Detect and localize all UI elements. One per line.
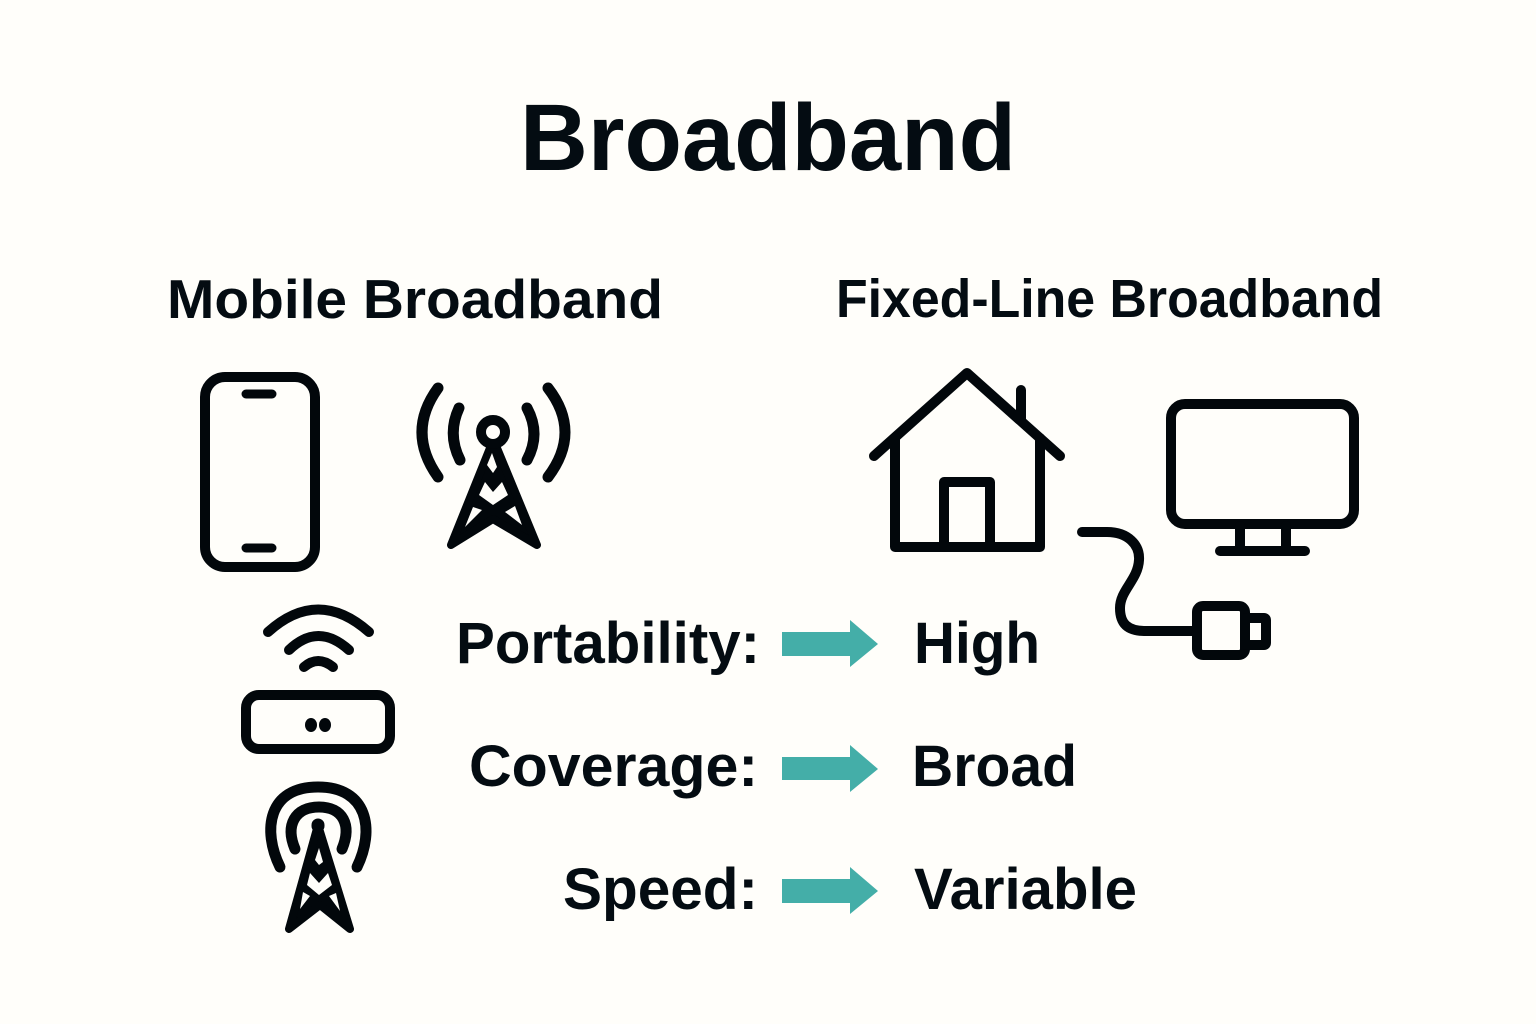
icon: cell tower with signal waves	[422, 388, 565, 545]
arrow	[782, 745, 878, 792]
row: portability	[456, 611, 1040, 676]
value: Variable	[914, 857, 1137, 922]
icon: house	[874, 373, 1060, 547]
icon: smartphone	[205, 377, 315, 567]
router body	[246, 695, 390, 749]
tower body	[451, 448, 537, 545]
antenna head	[481, 420, 505, 444]
heading: mobile broadband: Mobile Broadband	[167, 268, 663, 330]
row: coverage	[469, 734, 1077, 799]
icon: second cell tower	[271, 787, 366, 929]
value: Broad	[912, 734, 1077, 799]
lattice openings	[465, 453, 522, 527]
arrow	[782, 867, 878, 914]
router lights	[305, 718, 331, 732]
icon: monitor	[1171, 404, 1354, 551]
wifi waves	[268, 610, 369, 667]
title: Broadband	[520, 85, 1016, 191]
row: speed	[563, 857, 1137, 922]
icon: wifi router	[246, 610, 390, 749]
label: Speed:	[563, 857, 758, 922]
heading: fixed-line broadband: Fixed-Line Broadband	[836, 269, 1383, 329]
signal waves	[422, 388, 565, 477]
icon: cable and plug	[1082, 532, 1266, 655]
label: Coverage:	[469, 734, 758, 799]
tower body	[289, 825, 350, 929]
antenna tip and signal arcs	[271, 787, 366, 867]
label: Portability:	[456, 611, 760, 676]
lattice openings	[300, 848, 340, 911]
value: High	[914, 611, 1040, 676]
arrow	[782, 620, 878, 667]
